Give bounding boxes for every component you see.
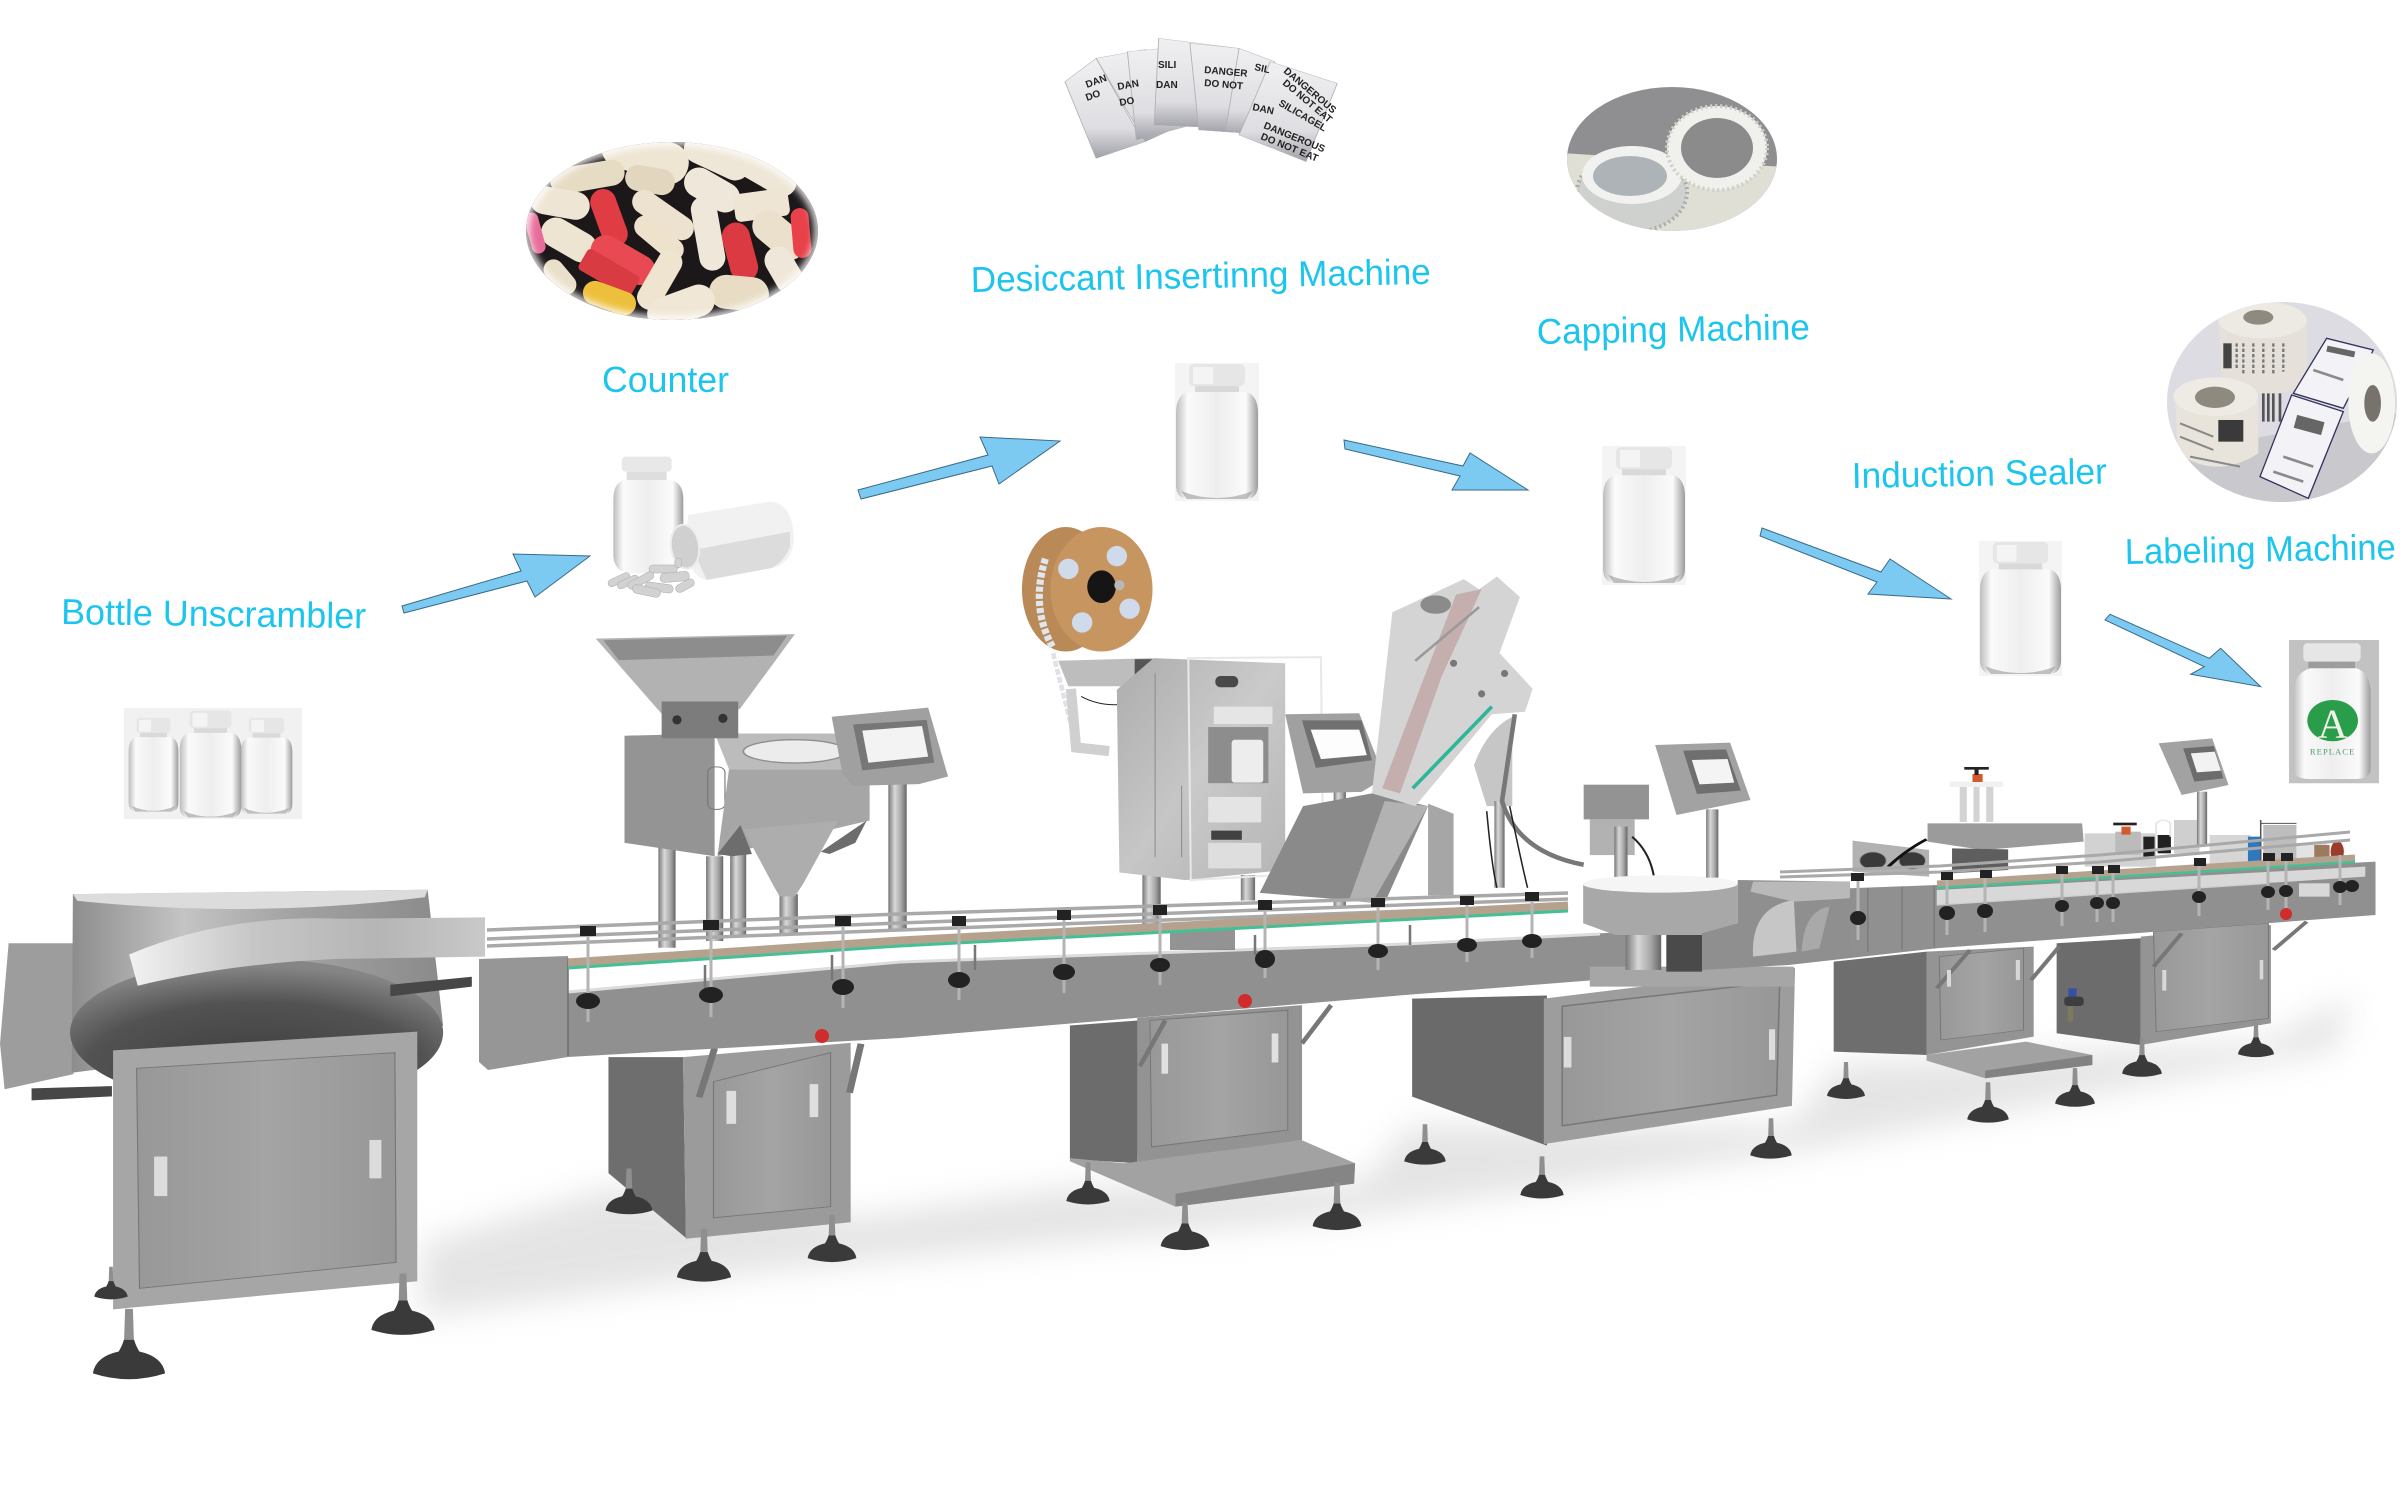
arrow: bottle unscrambler to counter	[402, 554, 590, 613]
counter pedestal feet	[606, 1169, 856, 1282]
sachet print: DANGEROUS	[1281, 66, 1338, 116]
clamp posts	[588, 855, 2340, 1022]
sealer posts	[1949, 767, 2003, 822]
unscrambler chute	[129, 917, 485, 986]
label: capping machine: Capping Machine	[1536, 306, 1810, 352]
photo: bottle caps	[1567, 87, 1777, 231]
mechanism box	[1117, 657, 1323, 880]
desiccant pedestal feet	[1066, 1162, 1361, 1250]
sachet print: DO	[1119, 95, 1136, 109]
sealer fans	[1853, 839, 1929, 877]
label: labeling machine: Labeling Machine	[2124, 526, 2396, 572]
upper clamps	[580, 853, 2293, 936]
bottle after induction sealer	[1979, 541, 2062, 676]
machine: counter head	[596, 634, 870, 948]
turret link	[1702, 880, 1937, 970]
machine: bottle unscrambler	[0, 890, 485, 1379]
unscrambler cabinet	[113, 1032, 417, 1309]
sachet print: DO NOT	[1204, 78, 1243, 92]
arrow: desiccant to capping	[1344, 440, 1528, 490]
conveyor: main bed	[479, 925, 1660, 1070]
unscrambler side box	[0, 943, 73, 1089]
sachet print: DAN	[1084, 73, 1108, 91]
elevator drive and cables	[1474, 714, 1584, 888]
photo: label rolls	[2160, 296, 2400, 508]
capping head	[1584, 785, 1654, 880]
green logo: A	[2318, 701, 2348, 747]
label: counter: Counter	[602, 359, 729, 400]
unscrambler drum	[72, 890, 443, 1073]
arrow: capping to sealer	[1760, 528, 1951, 599]
emergency stop buttons	[815, 908, 2292, 1043]
arrow: counter to desiccant	[858, 437, 1060, 499]
elevator panel	[1372, 577, 1533, 806]
machine: cap turret	[1583, 875, 1937, 987]
touch panel column	[1334, 786, 1346, 908]
sachet print: SILICAGEL	[1276, 98, 1328, 134]
machine: desiccant inserter	[1022, 527, 1346, 929]
label: desiccant inserting machine: Desiccant Insertinng Machine	[970, 251, 1431, 300]
sachet print: SILI	[1158, 60, 1177, 71]
feed arm	[1053, 653, 1170, 751]
barcode block	[2263, 393, 2280, 422]
valve	[2064, 988, 2084, 1022]
silica roll	[1022, 527, 1153, 652]
silver columns	[1142, 875, 1161, 929]
unscrambler brackets	[32, 977, 472, 1100]
counter hopper	[596, 634, 795, 738]
desiccant touch panel	[1285, 713, 1385, 793]
counter columns	[658, 847, 798, 948]
sachet print: DO	[1084, 88, 1102, 104]
machine: induction sealer	[1853, 767, 2084, 877]
sachet print: DAN	[1251, 102, 1275, 117]
guide rails	[487, 832, 2350, 946]
photo: desiccant sachets	[1065, 38, 1338, 165]
left cap	[1577, 146, 1687, 232]
sachet print: DO NOT EAT	[1259, 132, 1319, 165]
bottles: input bottles	[124, 708, 302, 819]
labeler touch panel	[2159, 738, 2229, 795]
machine: counter pedestal	[608, 1043, 861, 1239]
top roll	[2218, 302, 2307, 394]
floor shadow	[421, 996, 2351, 1317]
sachet print: DO NOT EAT	[1280, 78, 1334, 125]
sachet print: DANGEROUS	[1262, 121, 1327, 155]
sachet print: SIL	[1253, 62, 1271, 76]
green logo	[2307, 700, 2358, 747]
bottle after desiccant machine	[1175, 363, 1259, 501]
sachet print: DAN	[1156, 80, 1178, 91]
label: induction sealer: Induction Sealer	[1851, 451, 2107, 496]
sealer and labeler feet	[1827, 1022, 2274, 1123]
unscrambler feet	[93, 1267, 435, 1379]
conveyor: rails, belt and clamps	[487, 832, 2359, 1043]
sealer head	[1928, 823, 2084, 850]
belt	[568, 858, 2355, 968]
infeed underside gaps	[705, 925, 1410, 990]
capper touch panel	[1655, 743, 1751, 878]
lower clamp knobs	[576, 880, 2359, 1009]
sachet print: DAN	[1117, 78, 1140, 93]
photo: pills	[526, 142, 818, 320]
label strip	[2260, 338, 2395, 498]
unscrambler dark disc	[70, 959, 443, 1106]
label: bottle unscrambler: Bottle Unscrambler	[61, 591, 366, 636]
capper cabinet feet	[1404, 1118, 1792, 1199]
sachet print	[1084, 60, 1338, 165]
counter touch panel	[832, 708, 948, 931]
machine: capper hopper and elevator	[1260, 577, 1654, 903]
right bed	[1850, 862, 2376, 953]
bottle brand: REPLACE	[2310, 747, 2355, 757]
bottle after capping machine	[1602, 446, 1686, 585]
machine: sealer and labeler pedestals	[1827, 922, 2307, 1123]
bottles: open bottles with capsules	[607, 457, 794, 598]
counter funnel	[743, 821, 838, 896]
machine: labeler	[1850, 738, 2376, 953]
sachet print: DANGER	[1204, 65, 1249, 80]
front roll	[2173, 377, 2258, 467]
machine: capper cabinet	[1404, 968, 1795, 1199]
right cap	[1667, 106, 1767, 190]
machine: desiccant pedestal	[1070, 1005, 1355, 1207]
arrow: sealer to labeling	[2105, 614, 2261, 687]
labeled finished bottle	[2289, 640, 2379, 783]
